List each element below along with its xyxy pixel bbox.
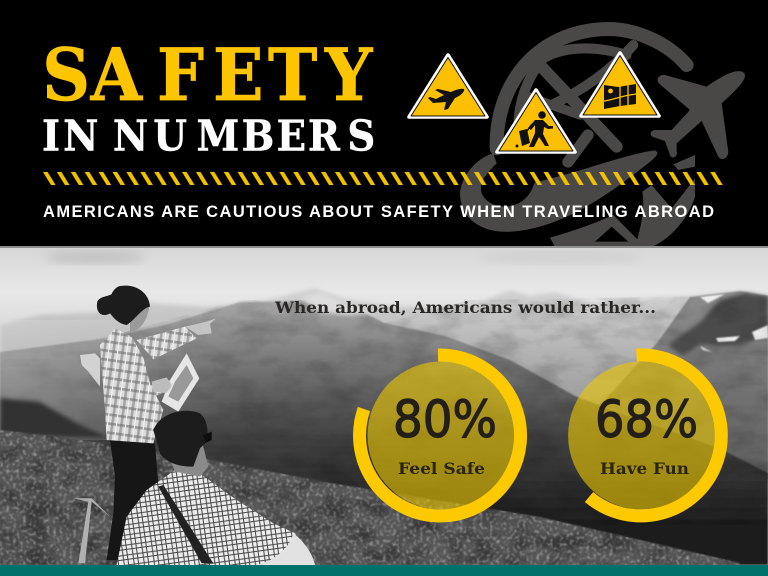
title: IN NUMBERS: IN NUMBERS [42, 111, 375, 161]
label: feel safe: Feel Safe [398, 459, 485, 478]
photo: mountain landscape [0, 246, 768, 565]
subtitle: AMERICANS ARE CAUTIOUS ABOUT SAFETY WHEN TRAVELING ABROAD [43, 203, 714, 221]
header band [0, 0, 768, 246]
stat: 68% have fun [568, 355, 721, 516]
label: have fun: Have Fun [600, 459, 689, 478]
stat: 80% feel safe [360, 355, 521, 516]
icon: traveler warning sign [497, 90, 575, 152]
icon: map warning sign [581, 53, 659, 116]
ring: 68 percent [589, 355, 721, 516]
value: 80%: 80% [393, 391, 497, 450]
heading: when abroad: When abroad, Americans would rather... [274, 298, 656, 317]
icon: airplane warning sign [409, 55, 487, 117]
photo: standing woman with map [73, 286, 216, 563]
footer band [0, 565, 768, 576]
hazard stripe divider [43, 172, 723, 185]
title: SAFETY: SAFETY [42, 33, 374, 118]
photo: seated man [117, 411, 315, 565]
ring: 80 percent [360, 355, 521, 516]
icon: globe and airplane [460, 29, 745, 247]
value: 68%: 68% [595, 391, 698, 450]
